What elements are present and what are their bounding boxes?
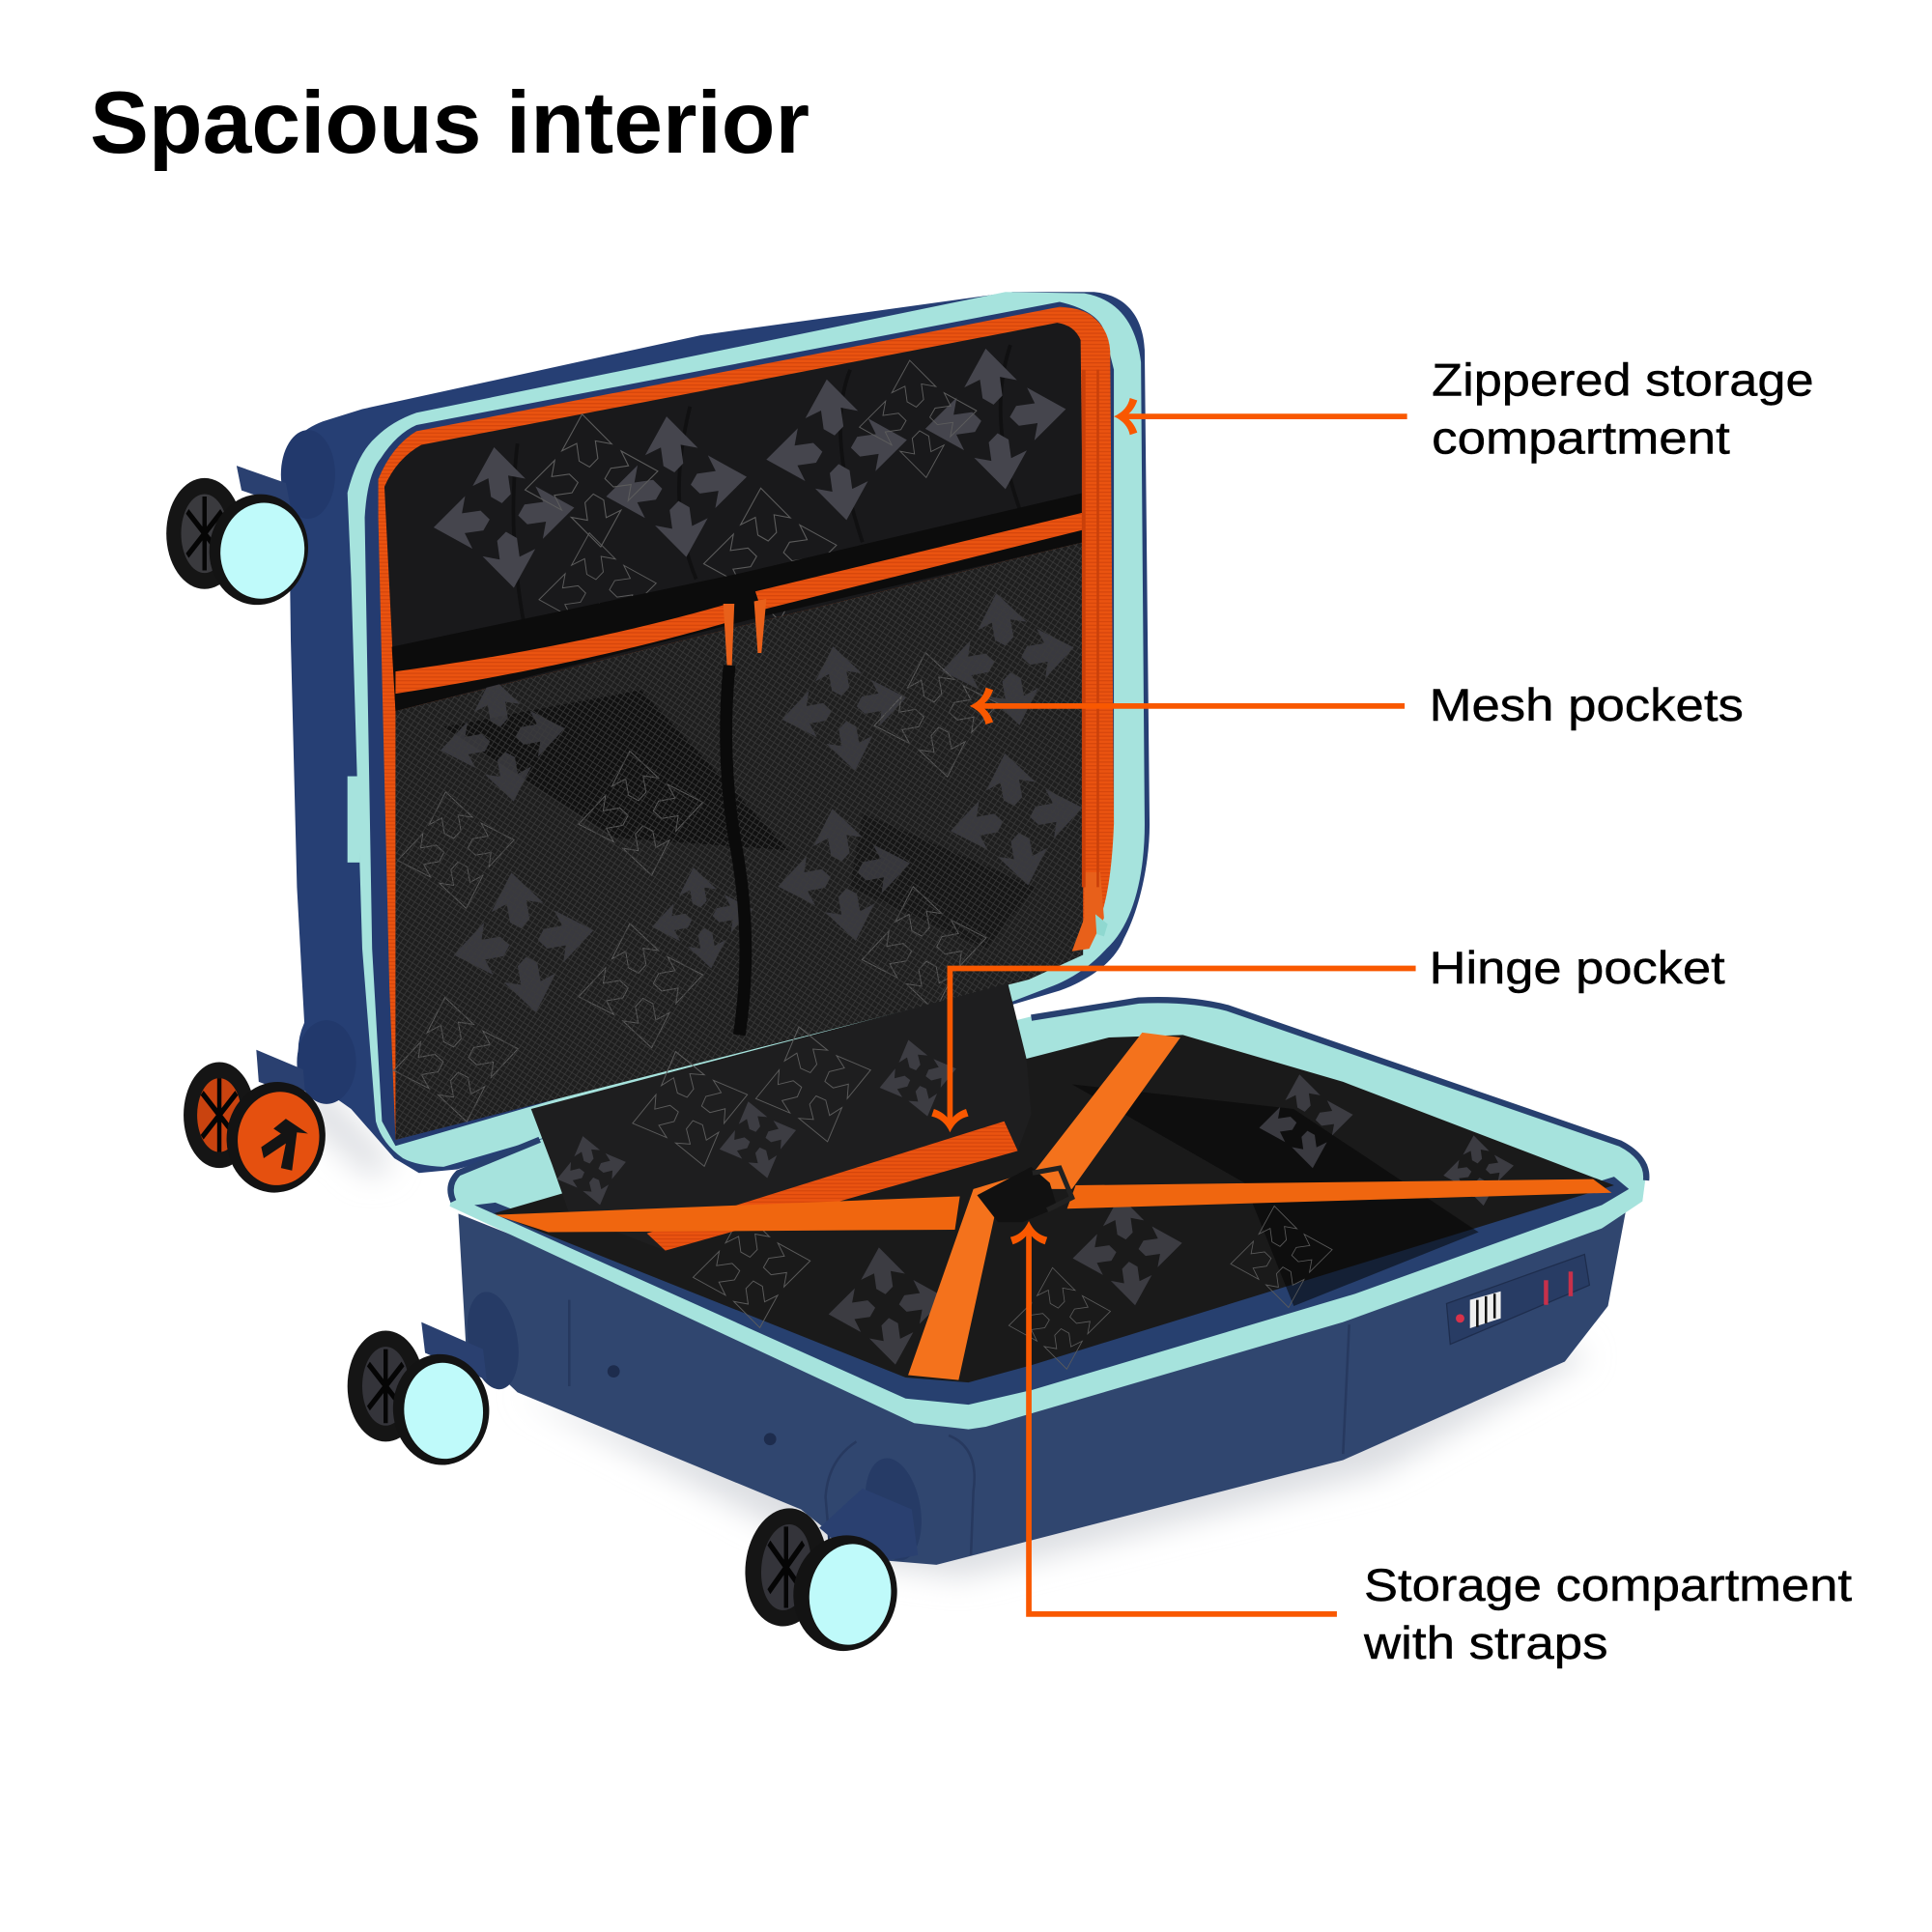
wheels: top left xyxy=(166,466,315,611)
label: mesh pockets: Mesh pockets xyxy=(1430,680,1744,731)
base: navy inner stripe xyxy=(474,1177,1629,1405)
callout: zippered storage compartment xyxy=(1114,355,1814,464)
base: combination lock xyxy=(1446,1254,1589,1345)
callout: hinge pocket xyxy=(931,943,1725,1132)
base: mint rim xyxy=(450,998,1647,1430)
label: storage compartment: Storage compartment xyxy=(1364,1560,1852,1611)
lid: main zipper tail and pulls xyxy=(1072,370,1108,952)
illustration: open suitcase xyxy=(166,292,1647,1658)
base: interior lining xyxy=(493,1035,1614,1382)
base: strap buckle xyxy=(977,1167,1072,1222)
lid: elastic centre band xyxy=(726,666,746,1035)
base: strap 2 right xyxy=(1067,1179,1611,1208)
lid: mint frame xyxy=(348,292,1145,1167)
lid: orange zipper surround xyxy=(379,307,1114,1140)
base: navy rim edge xyxy=(1032,1000,1646,1180)
lid: zipper pulls xyxy=(724,599,766,666)
label: storage compartment: with straps xyxy=(1363,1618,1608,1669)
lid: navy inner stripe xyxy=(365,301,1114,1146)
lid: mesh pocket xyxy=(383,542,1094,1140)
arrow: hinge pocket xyxy=(931,969,1416,1132)
ground shadow xyxy=(296,1084,1589,1577)
lid: black pocket band xyxy=(392,493,1083,711)
label: storage compartment xyxy=(1363,1560,1852,1669)
label: zippered storage xyxy=(1432,355,1814,464)
callout: storage compartment with straps xyxy=(1010,1221,1852,1669)
wheels: front right xyxy=(740,1489,918,1658)
label: hinge pocket: Hinge pocket xyxy=(1430,943,1725,994)
base: strap 2 left xyxy=(496,1197,960,1233)
title: Spacious interior xyxy=(90,74,810,172)
wheels: front left xyxy=(348,1322,493,1468)
lid: rear shell xyxy=(281,292,1150,1173)
base: hinge pocket zipper xyxy=(647,1122,1018,1251)
arrow: mesh pockets xyxy=(970,688,1405,724)
label: zippered storage: compartment xyxy=(1432,412,1730,464)
lid: left pocket zipper xyxy=(395,604,728,694)
wheels: bottom left with orange hubs xyxy=(184,1050,332,1199)
arrow: zippered storage xyxy=(1114,398,1407,435)
arrow: storage compartment xyxy=(1010,1221,1337,1614)
base: hinge pocket xyxy=(531,983,1032,1251)
label: zippered storage: Zippered storage xyxy=(1432,355,1814,406)
base: strap 1 xyxy=(908,1033,1180,1380)
lid: right pocket zipper xyxy=(755,513,1083,610)
lid: satin lining panel xyxy=(384,323,1083,711)
callout: mesh pockets xyxy=(970,680,1744,731)
base: lower shell xyxy=(458,1208,1627,1565)
